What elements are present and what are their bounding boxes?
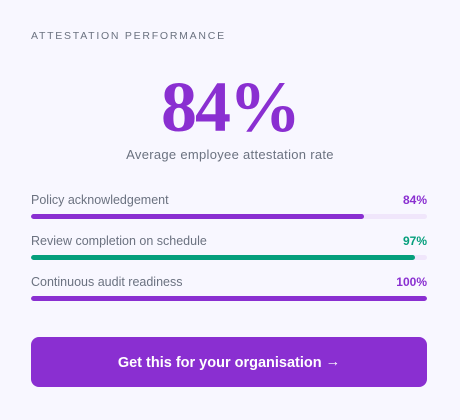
big stat: 84%: 84% — [161, 67, 299, 147]
metric row: review completion — [31, 234, 427, 260]
label: Review completion on schedule — [31, 234, 207, 248]
metric row: policy acknowledgement — [31, 192, 427, 219]
button: call to action — [31, 337, 427, 387]
stat caption: Average employee attestation rate — [126, 147, 334, 162]
value: 84% — [403, 192, 427, 206]
label: Continuous audit readiness — [31, 275, 182, 289]
value: 100% — [396, 274, 427, 288]
value: 97% — [403, 234, 427, 248]
progress bar — [31, 296, 427, 301]
progress bar — [31, 214, 427, 219]
metric row: continuous audit readiness — [31, 274, 427, 301]
heading: attestation performance: ATTESTATION PERFORMANCE — [31, 30, 226, 42]
progress bar — [31, 255, 427, 260]
button: call to action: Get this for your organisation → — [118, 354, 340, 371]
label: Policy acknowledgement — [31, 193, 169, 207]
